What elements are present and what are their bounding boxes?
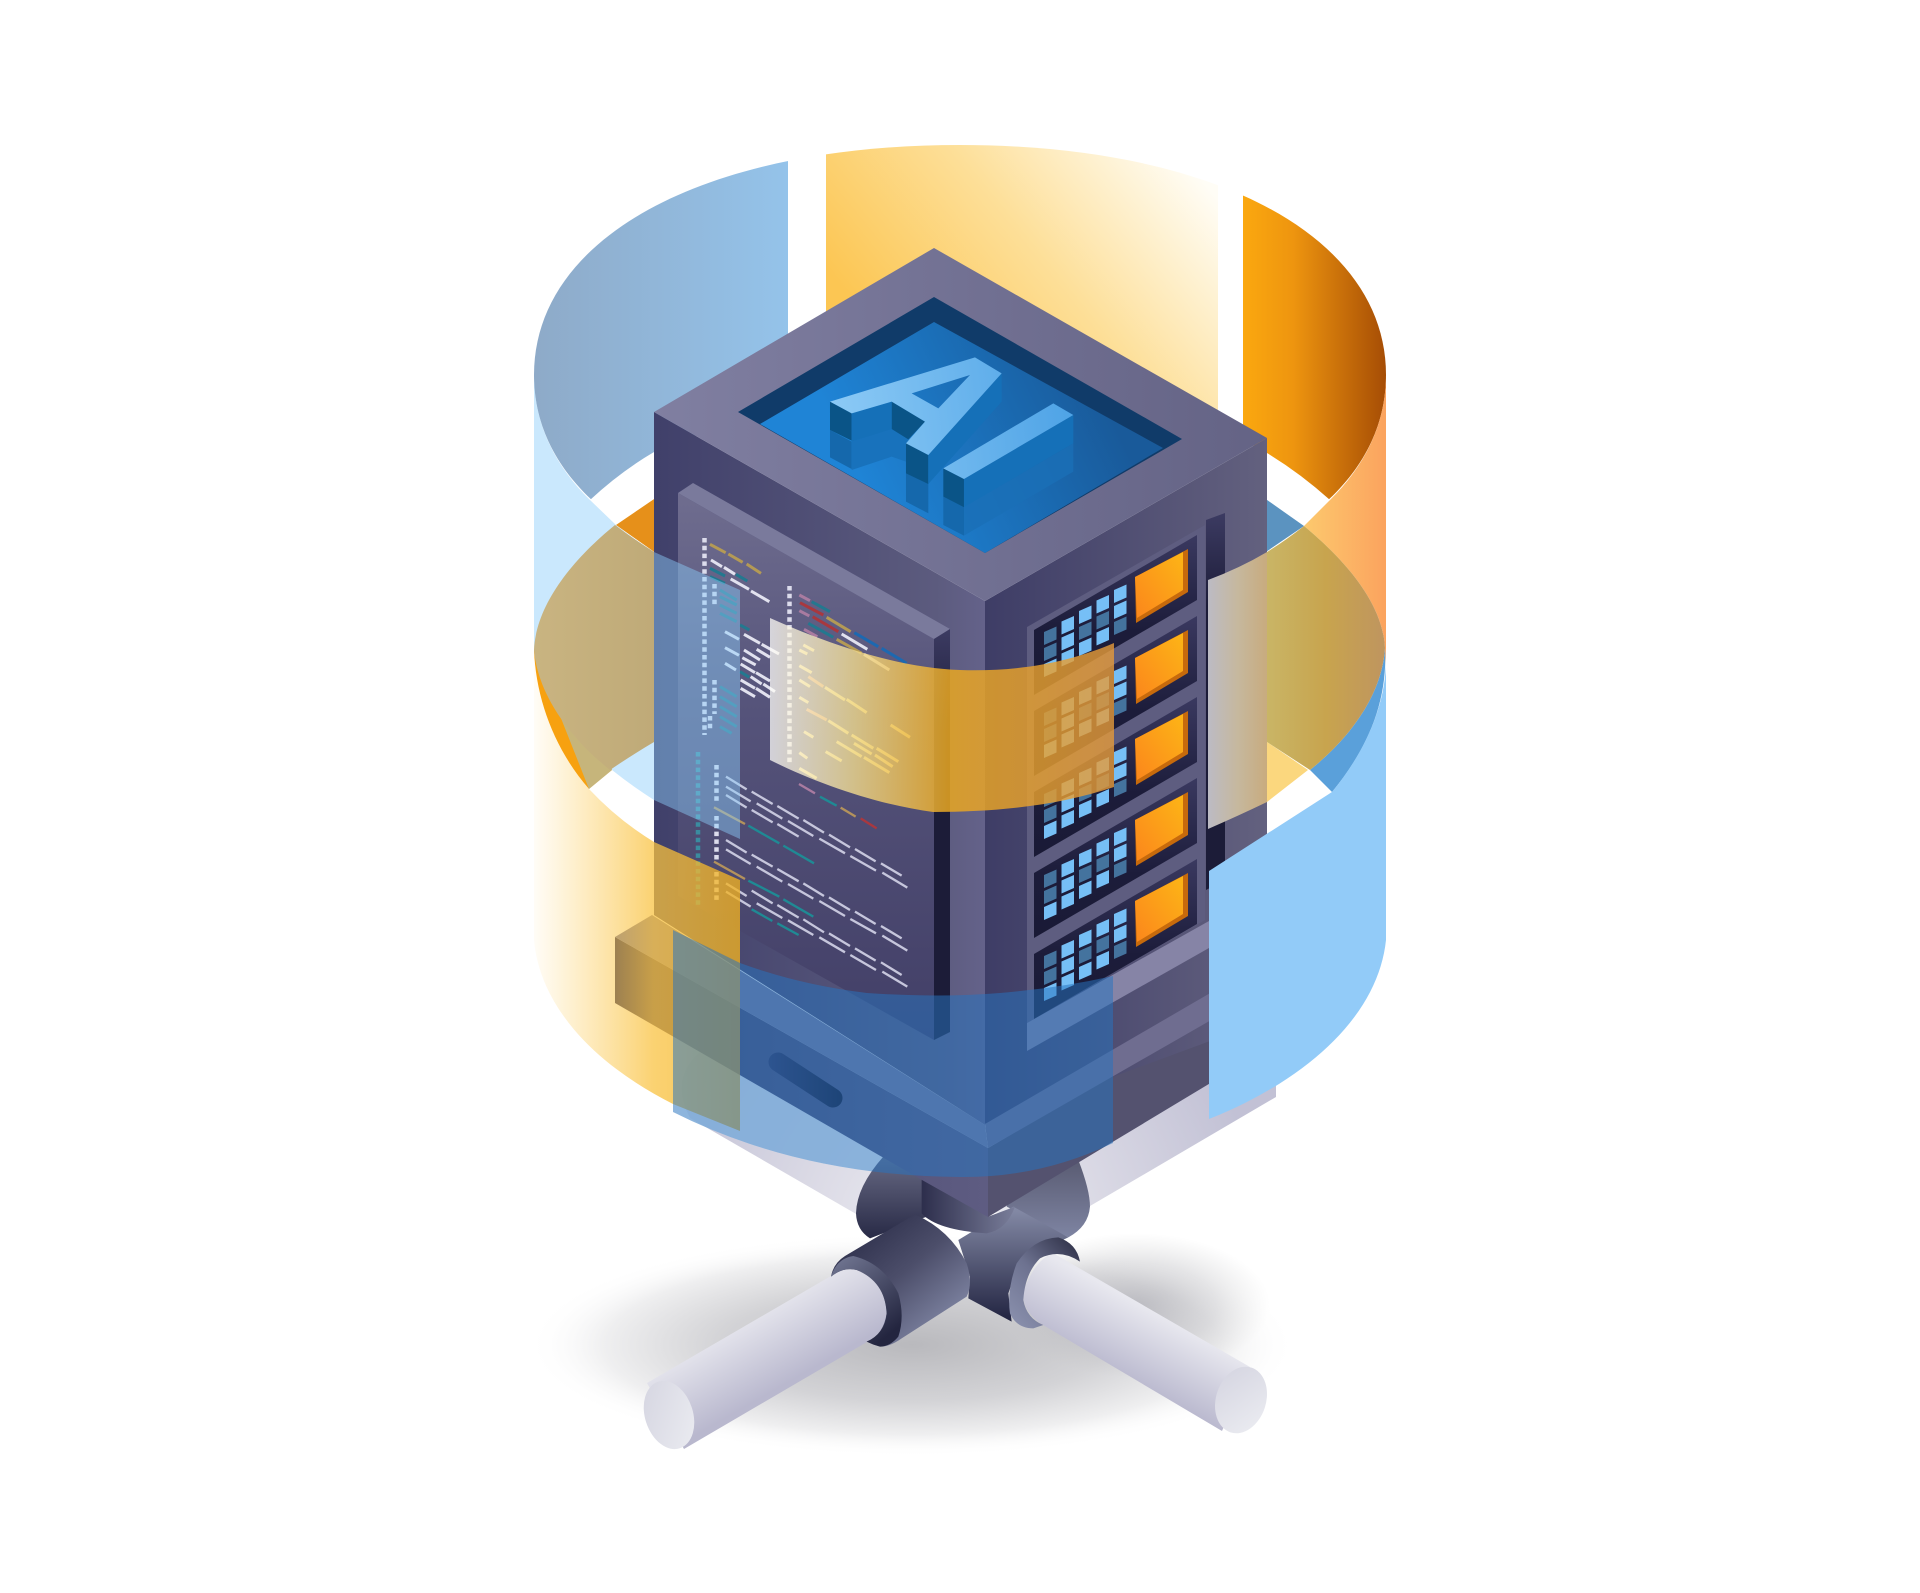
segment: lower blue <box>673 930 1113 1177</box>
code lines lower <box>714 777 907 987</box>
code panel face <box>678 493 934 1040</box>
blue sliver behind right tan <box>1260 495 1304 556</box>
back left dome <box>856 1157 927 1238</box>
orange sliver upper left <box>616 495 660 556</box>
rack side channel <box>1206 513 1225 890</box>
base: left side <box>615 937 988 1217</box>
illustration: isometric AI server inside cylinder rings <box>534 145 1386 1449</box>
code panel side <box>934 629 950 1040</box>
rack unit 5 <box>1034 859 1197 1019</box>
right face <box>985 438 1267 1124</box>
platform highlight under blue segment <box>673 1000 960 1177</box>
pale panel right <box>1208 552 1267 829</box>
front band <box>770 618 1114 812</box>
top ring: back segments <box>520 120 1400 665</box>
wall: light blue left <box>534 375 740 839</box>
centre collar <box>922 1177 1015 1233</box>
top recess shadow <box>738 297 1182 553</box>
tan lens left <box>534 525 654 770</box>
platform under server <box>682 1000 1276 1222</box>
pipe connector <box>831 1157 1090 1347</box>
segment: yellow back <box>826 145 1218 410</box>
front translucent overlays <box>534 375 1386 1177</box>
orange crescent lower left <box>534 650 612 789</box>
equipment rack <box>1027 513 1225 1051</box>
right collar ring <box>1009 1237 1080 1328</box>
code panel <box>678 483 950 1040</box>
letter reflections <box>830 430 964 536</box>
code lines upper <box>710 544 910 778</box>
base: right top band <box>985 960 1267 1148</box>
AI letters <box>830 357 1073 536</box>
top rim <box>654 248 1267 601</box>
pipe: right <box>1023 1253 1275 1440</box>
base: right side <box>988 985 1267 1217</box>
back right dome <box>1007 1160 1090 1237</box>
rack lower strip <box>1027 921 1209 1051</box>
server tower <box>615 248 1267 1217</box>
left collar ring <box>831 1256 902 1347</box>
code panel bevel <box>678 483 950 639</box>
centre cross <box>958 1207 1068 1322</box>
segment: lower yellow <box>534 650 740 1131</box>
letter A face <box>830 357 1002 455</box>
letter I <box>943 468 964 507</box>
segment: blue left <box>534 161 788 500</box>
base slot <box>778 1062 833 1098</box>
rack unit 2 <box>1034 616 1197 776</box>
middle ring: back pieces <box>534 495 1385 802</box>
left collar <box>831 1214 970 1347</box>
blue crescent lower right <box>1310 648 1385 792</box>
segment: orange right <box>1243 196 1386 500</box>
rack unit 4 <box>1034 778 1197 938</box>
letter A depth <box>852 428 908 473</box>
top blue screen <box>760 322 1163 553</box>
base: left face lower <box>615 915 988 1148</box>
segment: light blue right <box>1209 660 1386 1119</box>
rack unit 3 <box>1034 697 1197 857</box>
line number dots <box>698 538 790 905</box>
ground shadow <box>527 1233 1297 1457</box>
rack unit 1 <box>1034 535 1197 695</box>
rack frame <box>1027 525 1205 1023</box>
tan lens right <box>1267 526 1385 770</box>
left face <box>654 412 985 1125</box>
yellow wedge lower right <box>1267 742 1308 802</box>
pipe: left <box>635 1262 888 1456</box>
wall: peach right <box>1304 375 1386 665</box>
